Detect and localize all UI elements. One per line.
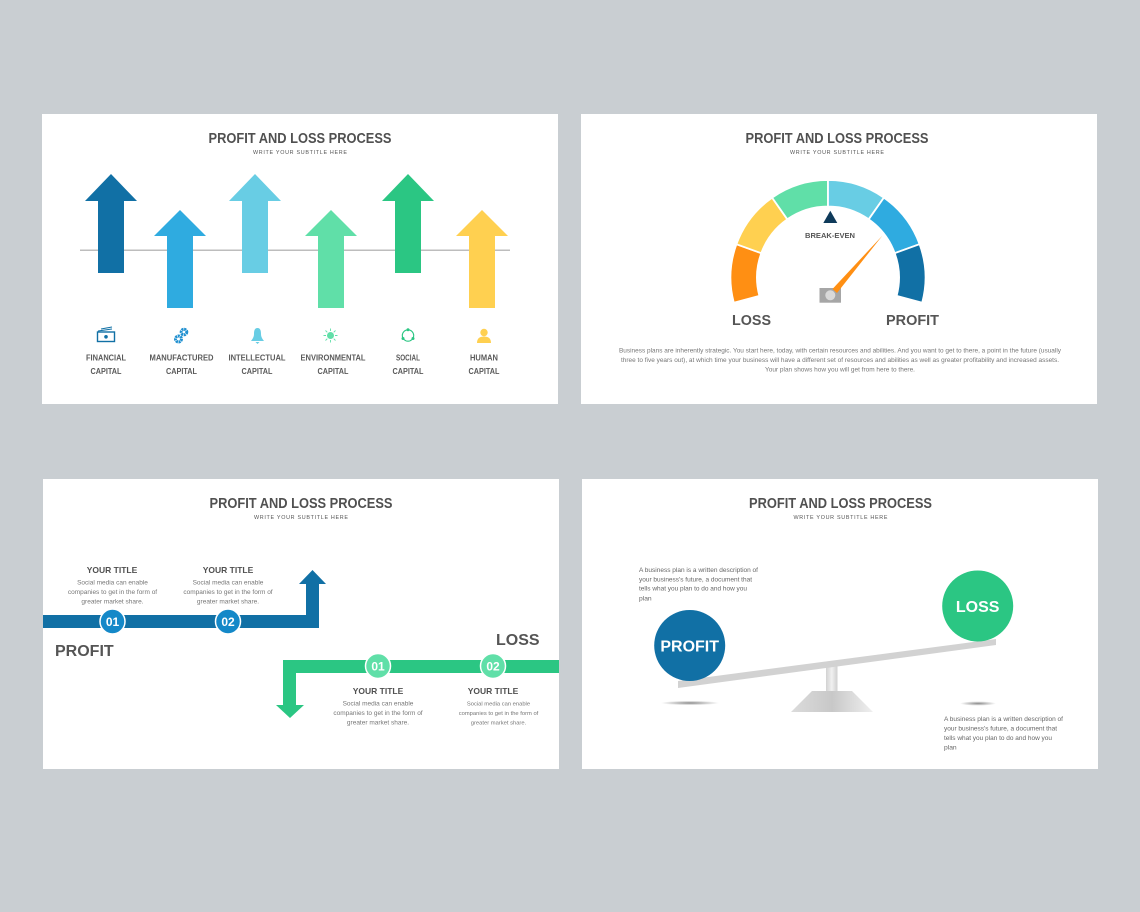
label: intellectual capital: CAPITAL bbox=[242, 367, 273, 376]
text block: bottom right: A business plan is a written description of bbox=[944, 716, 1063, 723]
step badge 01 green bbox=[366, 654, 390, 678]
description bbox=[619, 348, 1062, 374]
text block: profit step 1: Social media can enable bbox=[77, 580, 148, 586]
step badge 02 green bbox=[480, 654, 506, 678]
text block: top left: your business's future, a document that bbox=[639, 576, 752, 584]
description: Business plans are inherently strategic. You start here, today, with certain resources and abilities. And you want to get to there, a point in the future (usually bbox=[619, 348, 1062, 354]
label: human capital bbox=[468, 354, 500, 376]
subtitle: WRITE YOUR SUBTITLE HERE bbox=[254, 515, 348, 521]
arrow: manufactured bbox=[154, 210, 206, 308]
text block: loss step 1: YOUR TITLE bbox=[353, 686, 404, 696]
step badge 02 blue: 02 bbox=[221, 615, 235, 629]
gauge dial bbox=[731, 180, 925, 303]
label: financial capital bbox=[86, 354, 126, 376]
icon: person bbox=[477, 329, 491, 343]
text block: bottom right: plan bbox=[944, 744, 957, 752]
text block: loss step 1 bbox=[333, 686, 423, 726]
text block: bottom right: your business's future, a document that bbox=[944, 726, 1057, 732]
text block: loss step 1: Social media can enable bbox=[343, 700, 414, 708]
label: environmental capital: CAPITAL bbox=[318, 367, 349, 376]
gauge needle bbox=[820, 236, 882, 303]
ball: loss: LOSS bbox=[956, 599, 1000, 616]
step badge 01 blue bbox=[100, 609, 125, 634]
label: loss: LOSS bbox=[732, 313, 771, 329]
text block: top left bbox=[639, 567, 758, 602]
description: three to five years out), at which time your business will have a different set of resources and abilities as well as greater profitability and increased assets. bbox=[621, 357, 1059, 364]
text block: profit step 1: companies to get in the form of bbox=[68, 589, 157, 596]
label: human capital: HUMAN bbox=[470, 354, 498, 362]
text block: profit step 2 bbox=[183, 565, 273, 606]
label: intellectual capital: INTELLECTUAL bbox=[228, 354, 286, 362]
text block: profit step 1: YOUR TITLE bbox=[87, 565, 138, 575]
label: profit: PROFIT bbox=[886, 313, 939, 329]
break-even marker bbox=[823, 211, 837, 223]
ball: profit: PROFIT bbox=[660, 638, 719, 656]
text block: loss step 2: greater market share. bbox=[471, 720, 527, 726]
shadow: left bbox=[661, 701, 719, 705]
label: loss: LOSS bbox=[496, 632, 540, 649]
icon: gears bbox=[176, 329, 187, 342]
text block: top left: A business plan is a written description of bbox=[639, 567, 758, 574]
panel: seesaw bbox=[582, 479, 1098, 769]
arrow: environmental bbox=[305, 210, 357, 308]
label: manufactured capital bbox=[150, 354, 214, 376]
text block: profit step 2: YOUR TITLE bbox=[203, 565, 254, 575]
seesaw stand bbox=[791, 666, 873, 712]
text block: profit step 2: companies to get in the form of bbox=[183, 589, 273, 596]
label: manufactured capital: MANUFACTURED bbox=[150, 354, 214, 362]
panel: capital arrows bbox=[42, 114, 558, 404]
heading: PROFIT AND LOSS PROCESS bbox=[746, 131, 929, 147]
ball: loss bbox=[942, 570, 1013, 642]
text block: bottom right bbox=[944, 716, 1063, 752]
label: financial capital: FINANCIAL bbox=[86, 354, 126, 362]
label: manufactured capital: CAPITAL bbox=[166, 367, 197, 376]
heading: PROFIT AND LOSS PROCESS bbox=[749, 496, 932, 512]
text block: top left: plan bbox=[639, 596, 652, 602]
text block: loss step 2: Social media can enable bbox=[467, 702, 530, 708]
icon: money bbox=[98, 327, 114, 342]
heading: PROFIT AND LOSS PROCESS bbox=[210, 496, 393, 512]
text block: profit step 1 bbox=[68, 565, 157, 606]
arrow: intellectual bbox=[229, 174, 281, 273]
icon: bell bbox=[251, 328, 264, 344]
text block: profit step 1: greater market share. bbox=[81, 598, 144, 606]
text block: profit step 2: greater market share. bbox=[197, 598, 259, 606]
label: social capital bbox=[392, 354, 424, 376]
text block: top left: tells what you plan to do and how you bbox=[639, 586, 747, 592]
text block: loss step 2: YOUR TITLE bbox=[468, 686, 519, 696]
shadow: right bbox=[960, 701, 996, 706]
arrow: social bbox=[382, 174, 434, 273]
label: social capital: SOCIAL bbox=[396, 354, 420, 362]
step badge 01 green: 01 bbox=[371, 660, 385, 674]
arrow: financial bbox=[85, 174, 137, 273]
subtitle: WRITE YOUR SUBTITLE HERE bbox=[253, 150, 347, 156]
step badge 02 blue bbox=[216, 609, 240, 634]
arrow: profit path bbox=[43, 570, 326, 628]
description: Your plan shows how you will get from here to there. bbox=[765, 366, 915, 374]
label: profit: PROFIT bbox=[55, 643, 114, 660]
arrow: human bbox=[456, 210, 508, 308]
text block: bottom right: tells what you plan to do and how you bbox=[944, 735, 1052, 742]
ball: profit bbox=[654, 610, 725, 681]
label: environmental capital bbox=[300, 354, 366, 376]
heading: PROFIT AND LOSS PROCESS bbox=[208, 131, 392, 147]
break-even label: BREAK-EVEN bbox=[805, 231, 855, 240]
text block: loss step 2 bbox=[459, 686, 539, 726]
label: social capital: CAPITAL bbox=[392, 367, 424, 376]
arrow: loss path bbox=[276, 660, 559, 718]
subtitle: WRITE YOUR SUBTITLE HERE bbox=[790, 150, 884, 156]
text block: profit step 2: Social media can enable bbox=[193, 580, 264, 586]
seesaw beam bbox=[678, 639, 996, 688]
panel: gauge bbox=[581, 114, 1097, 404]
label: financial capital: CAPITAL bbox=[90, 367, 122, 376]
step badge 02 green: 02 bbox=[486, 660, 500, 674]
icon: social cycle bbox=[402, 328, 414, 341]
text block: loss step 1: companies to get in the form of bbox=[333, 710, 423, 717]
text block: loss step 1: greater market share. bbox=[347, 720, 409, 726]
label: environmental capital: ENVIRONMENTAL bbox=[300, 354, 366, 362]
label: human capital: CAPITAL bbox=[468, 367, 500, 376]
label: intellectual capital bbox=[228, 354, 286, 376]
text block: loss step 2: companies to get in the form of bbox=[459, 711, 539, 717]
step badge 01 blue: 01 bbox=[106, 615, 119, 629]
icon: sun bbox=[324, 328, 338, 342]
panel: process arrows bbox=[43, 479, 559, 769]
subtitle: WRITE YOUR SUBTITLE HERE bbox=[794, 515, 888, 521]
